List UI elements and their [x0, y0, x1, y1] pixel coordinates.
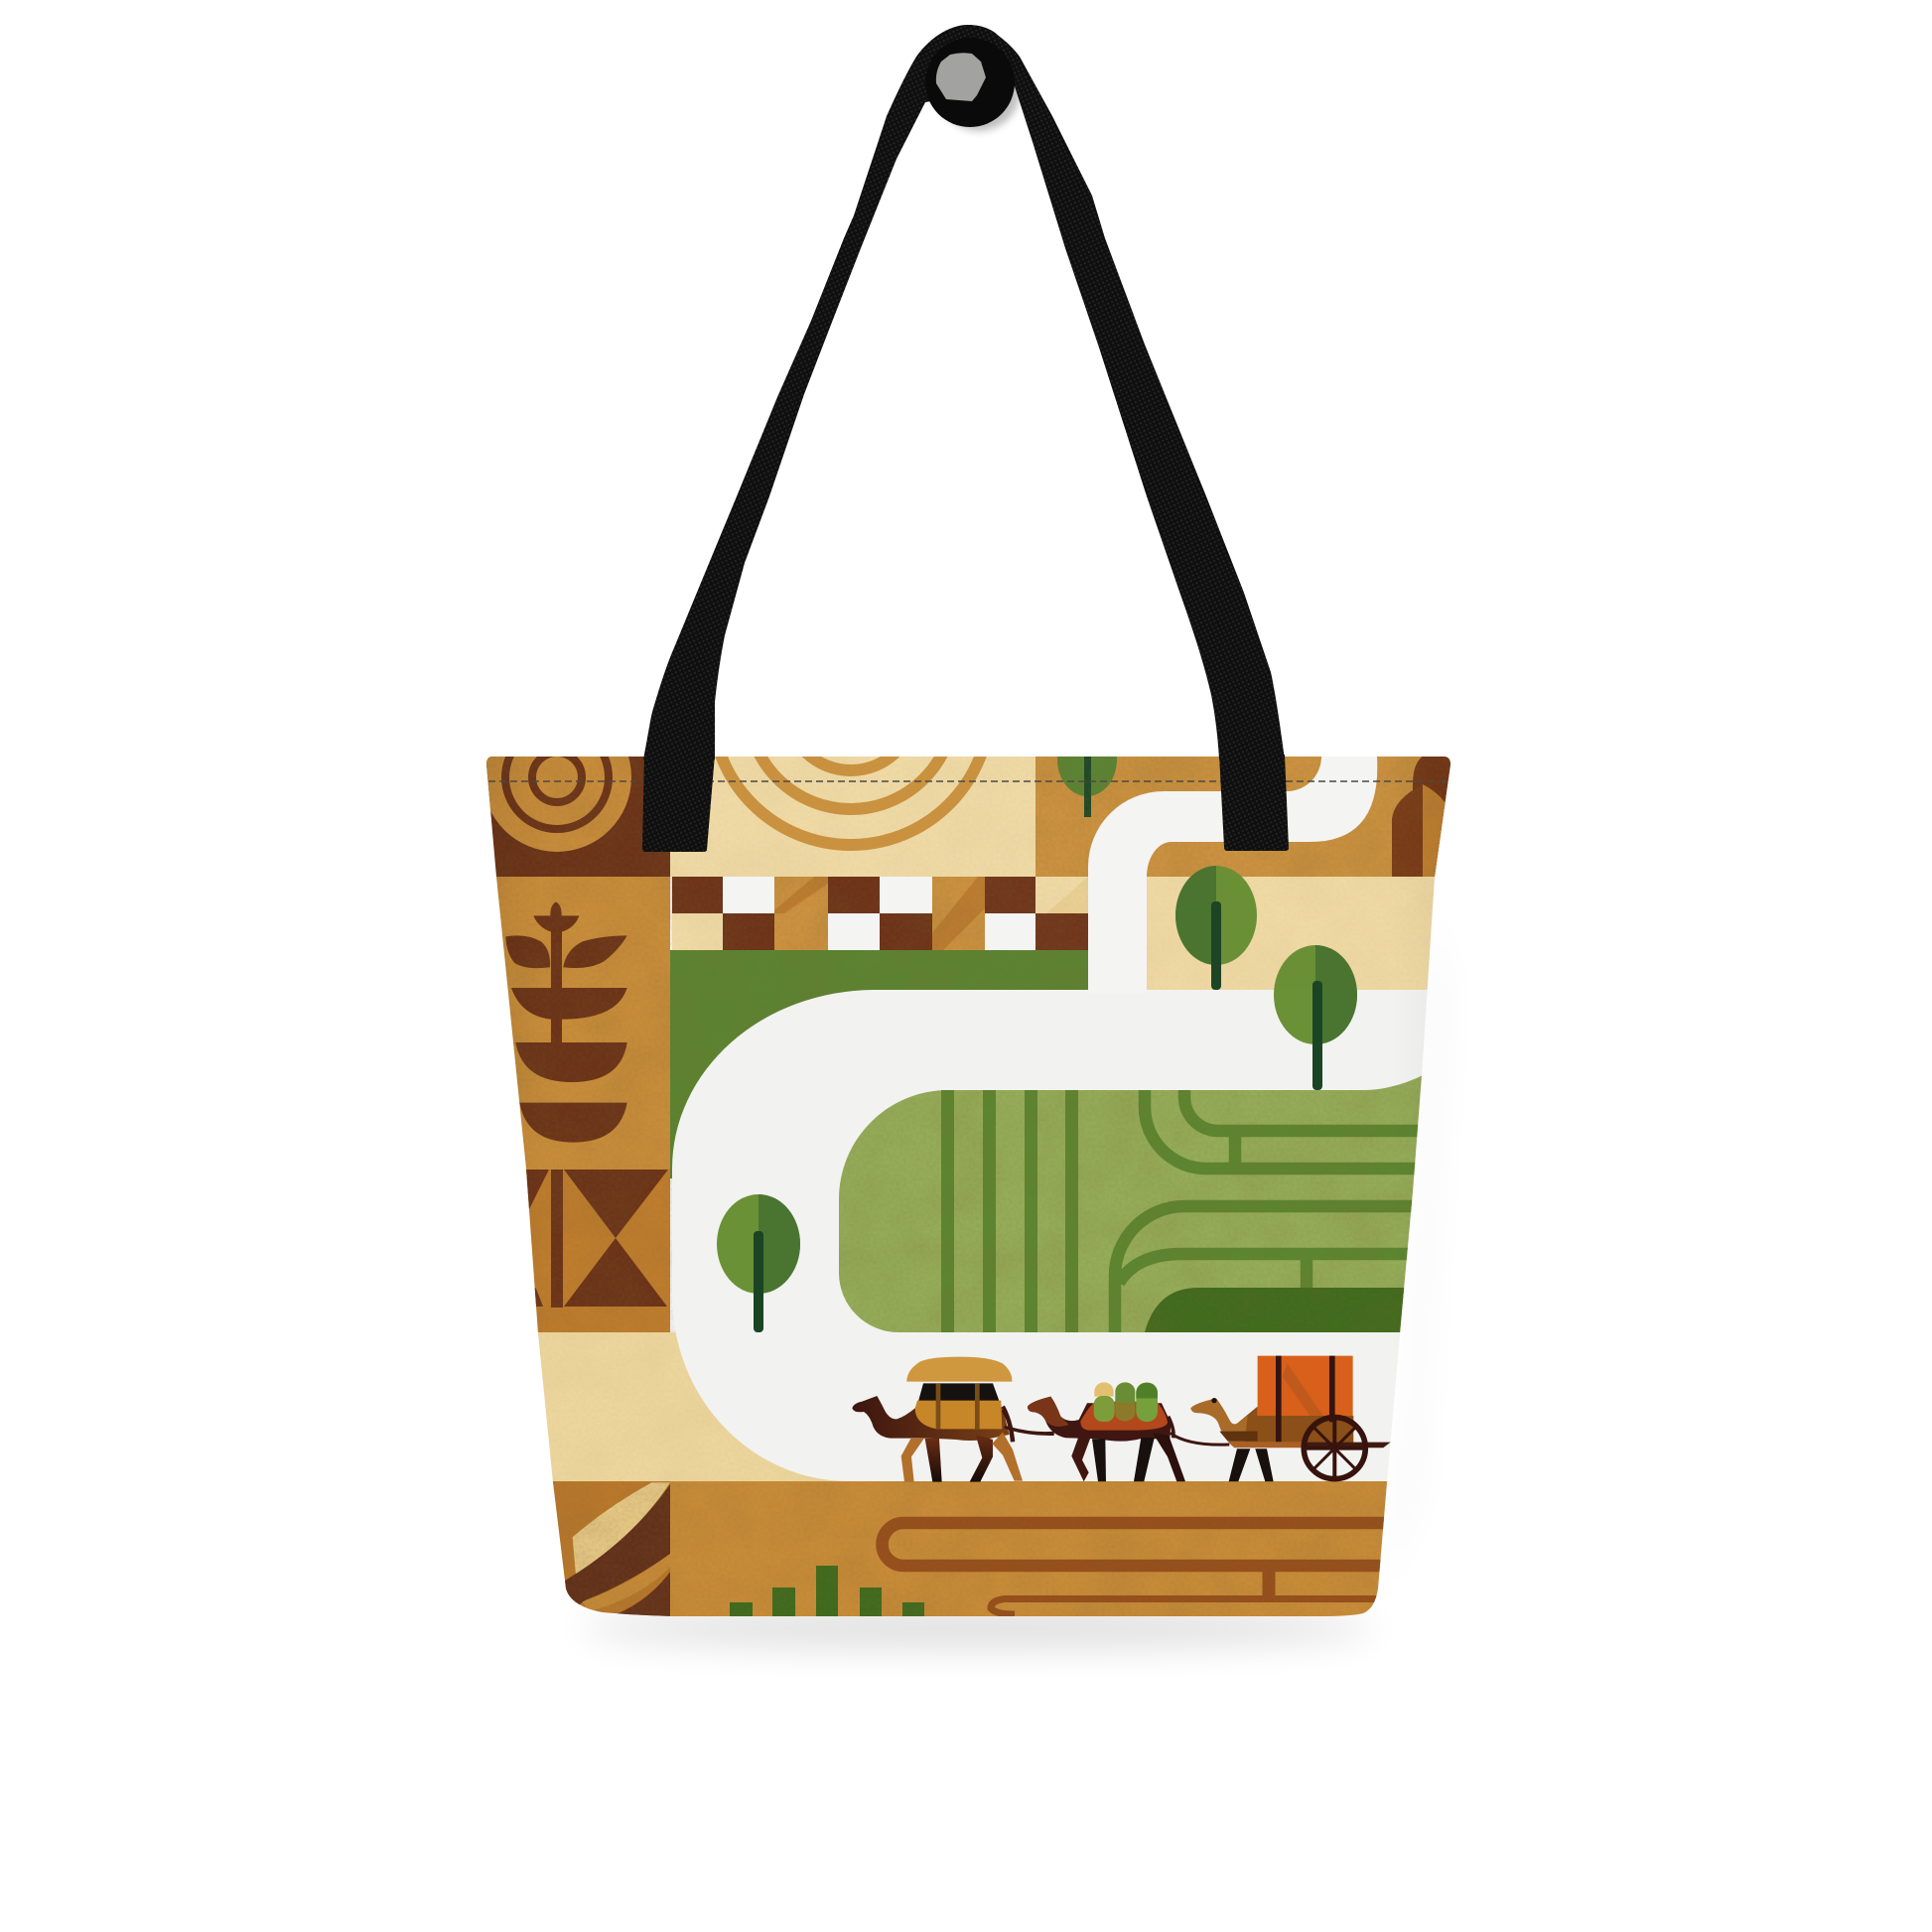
wall hook disc: [925, 38, 1015, 127]
field curved rows: [1115, 1090, 1430, 1332]
bag printed body: [486, 757, 1450, 1616]
rope: [1005, 1427, 1054, 1434]
panel: orange column with plant motif: [496, 877, 670, 1170]
icon: tree at top: [1057, 757, 1117, 817]
panel: orange block top right: [1035, 750, 1462, 990]
cart box: [1258, 1356, 1353, 1422]
cart wheel: [1304, 1418, 1365, 1479]
camel 2 with green bags: [1003, 1382, 1229, 1481]
right strap tab: [1219, 755, 1289, 851]
ground shadow beneath bag: [581, 894, 1449, 1648]
panel: bottom-left diagonal band block: [552, 1481, 670, 1616]
panel: dark green block: [670, 950, 1088, 1178]
panel: tribal triangles: [526, 1170, 670, 1332]
tote bag product illustration: [486, 25, 1450, 1659]
panel: orange ground strip: [670, 1481, 1405, 1620]
rope: [1005, 1427, 1054, 1434]
icon: tree upper right: [1175, 866, 1257, 990]
icon: tree on road: [1274, 945, 1357, 1090]
fabric grain and blotch overlay: [477, 745, 1459, 1628]
top hem stitching: [488, 780, 1448, 782]
winding white road large sweep: [672, 990, 1088, 1481]
camel 1 with canopy: [852, 1357, 1054, 1482]
panel: cream block with orange arcs: [670, 757, 1035, 877]
hook shadow: [937, 48, 1021, 131]
brown pipe lines: [882, 1523, 1390, 1614]
panel: cream band lower left: [538, 1332, 847, 1481]
camel 3 pulling orange cart: [1190, 1356, 1391, 1481]
icon: plant motif: [505, 901, 627, 1143]
panel: top-left brown square with concentric rings: [486, 757, 670, 877]
bar chart motif: [730, 1566, 924, 1617]
winding white road upper branch: [1088, 757, 1378, 877]
icon: tree left: [717, 1194, 800, 1332]
black strap handle: [643, 25, 1285, 759]
edge shading: [477, 745, 1459, 1628]
icon: brown arch top right: [1392, 757, 1450, 877]
panel: checker band: [672, 877, 1088, 950]
field vertical rows: [941, 1090, 1078, 1332]
dark green blob: [1145, 1288, 1430, 1332]
panel: light green field: [839, 1076, 1422, 1332]
left strap tab: [642, 755, 715, 852]
